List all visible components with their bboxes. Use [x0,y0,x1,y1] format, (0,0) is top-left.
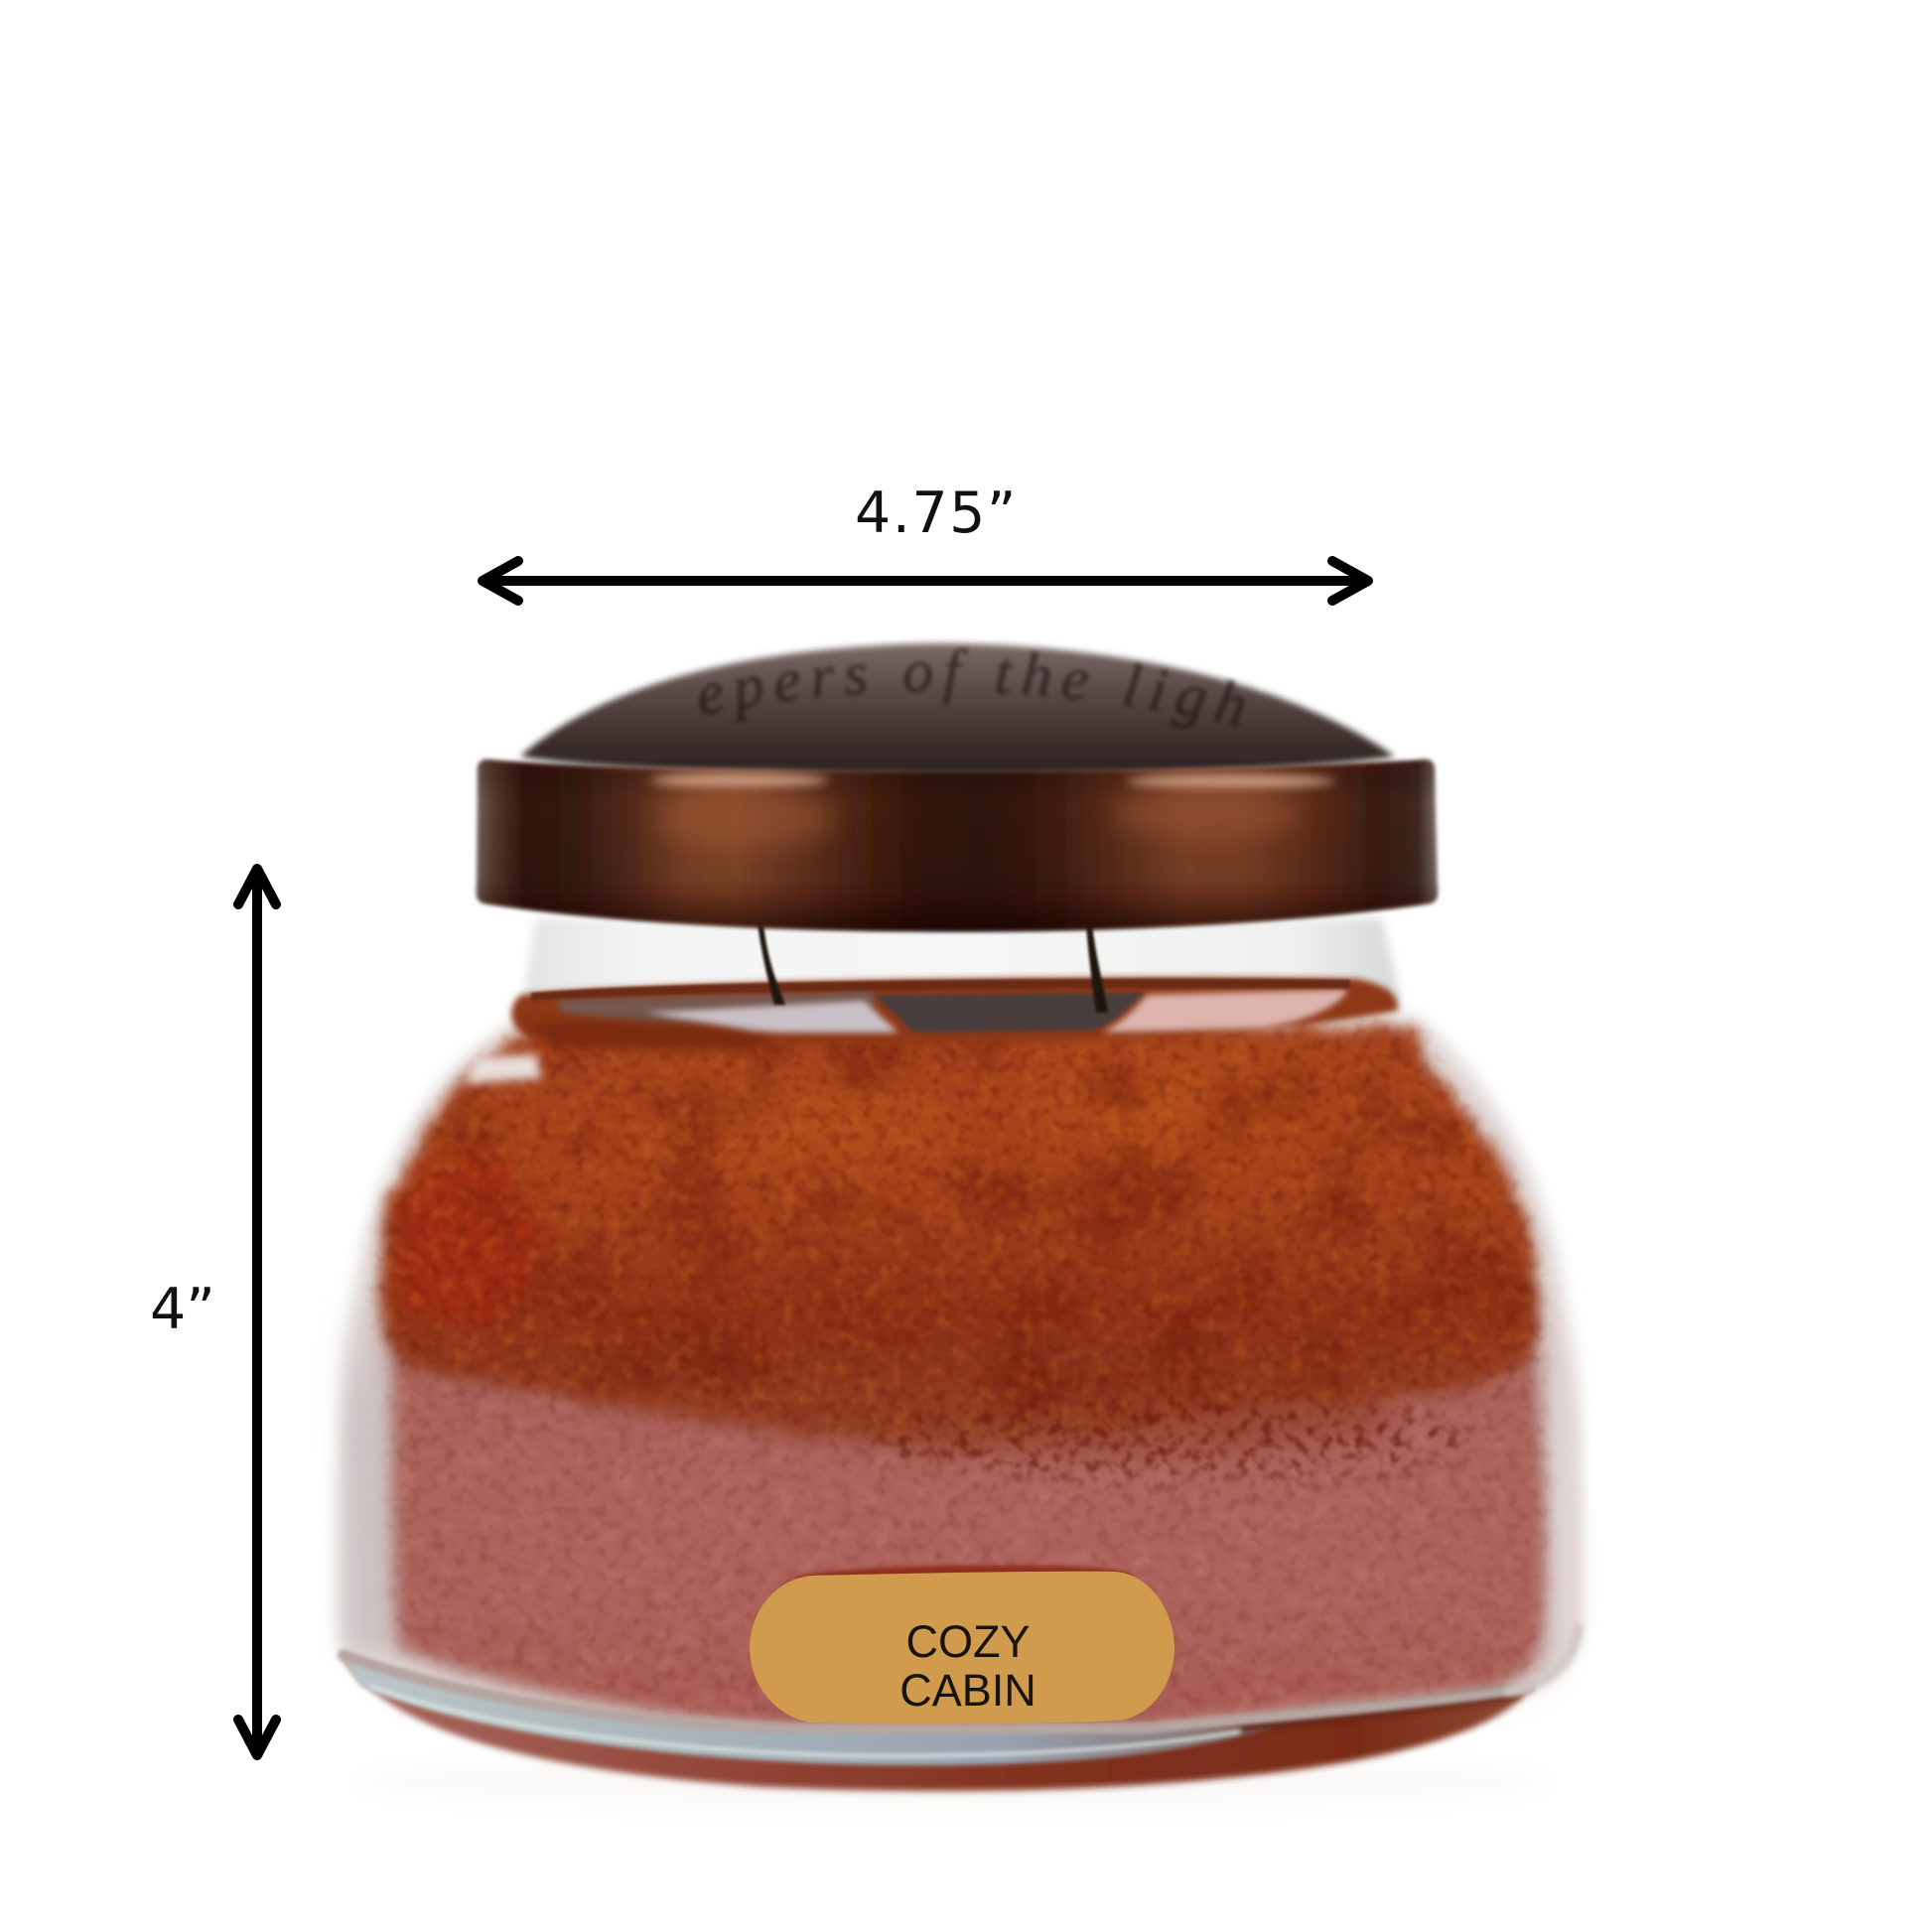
product label: CABIN [899,1665,1036,1716]
arrow: width dimension [483,561,1368,601]
base tint [340,1653,1530,1791]
arrow: height dimension [238,869,276,1755]
rim corner [1509,1628,1578,1691]
left red blotch [392,1157,541,1325]
right glass wall [1551,1311,1579,1668]
lid brim [477,759,1438,931]
label name: COZY [905,1616,1031,1667]
orange highlights [725,1094,919,1168]
fine bright speckle [338,1023,1588,1449]
right reflection [1102,989,1348,1033]
fine dark speckle [338,1023,1588,1449]
glass rim [344,1655,1530,1728]
product label [750,1572,1174,1724]
wax lower layer [338,1291,1588,1737]
neck notch [465,1054,542,1084]
left shadow under rim [526,1020,774,1050]
lid dome [520,643,1395,774]
dark band along the layer edge [748,1309,1271,1352]
dark flecks below the layer edge [854,1390,1489,1499]
glass highlight line [369,1686,1241,1756]
height dimension label: 4” [150,1277,215,1342]
wax upper layer [338,1023,1588,1499]
glass body [339,1018,1580,1728]
dark centre pool [874,993,1147,1033]
glass neck [521,918,1402,1013]
dark wax rim band [531,979,1350,1001]
dark shadow under rim [1241,1692,1519,1725]
brim shading [477,759,1438,931]
brim highlights [650,773,829,787]
glass base [340,1628,1578,1791]
surface shadow [357,1754,1549,1810]
candle jar [330,638,1589,1799]
wax pool surface [511,977,1398,1050]
left reflection [645,1001,898,1033]
mottled edge into lower layer [556,1370,1390,1455]
large mottling [368,1018,1548,1415]
soft wax edge [384,1320,1552,1725]
wicks [758,923,1108,1013]
blue glass band [343,1656,1281,1765]
engraved lid lettering: epers of the ligh [698,645,1246,730]
left glass wall [343,1291,389,1653]
width dimension label: 4.75” [855,481,1018,546]
lid [473,638,1442,935]
label shadow [794,1565,1132,1588]
left melt area [556,991,874,1031]
